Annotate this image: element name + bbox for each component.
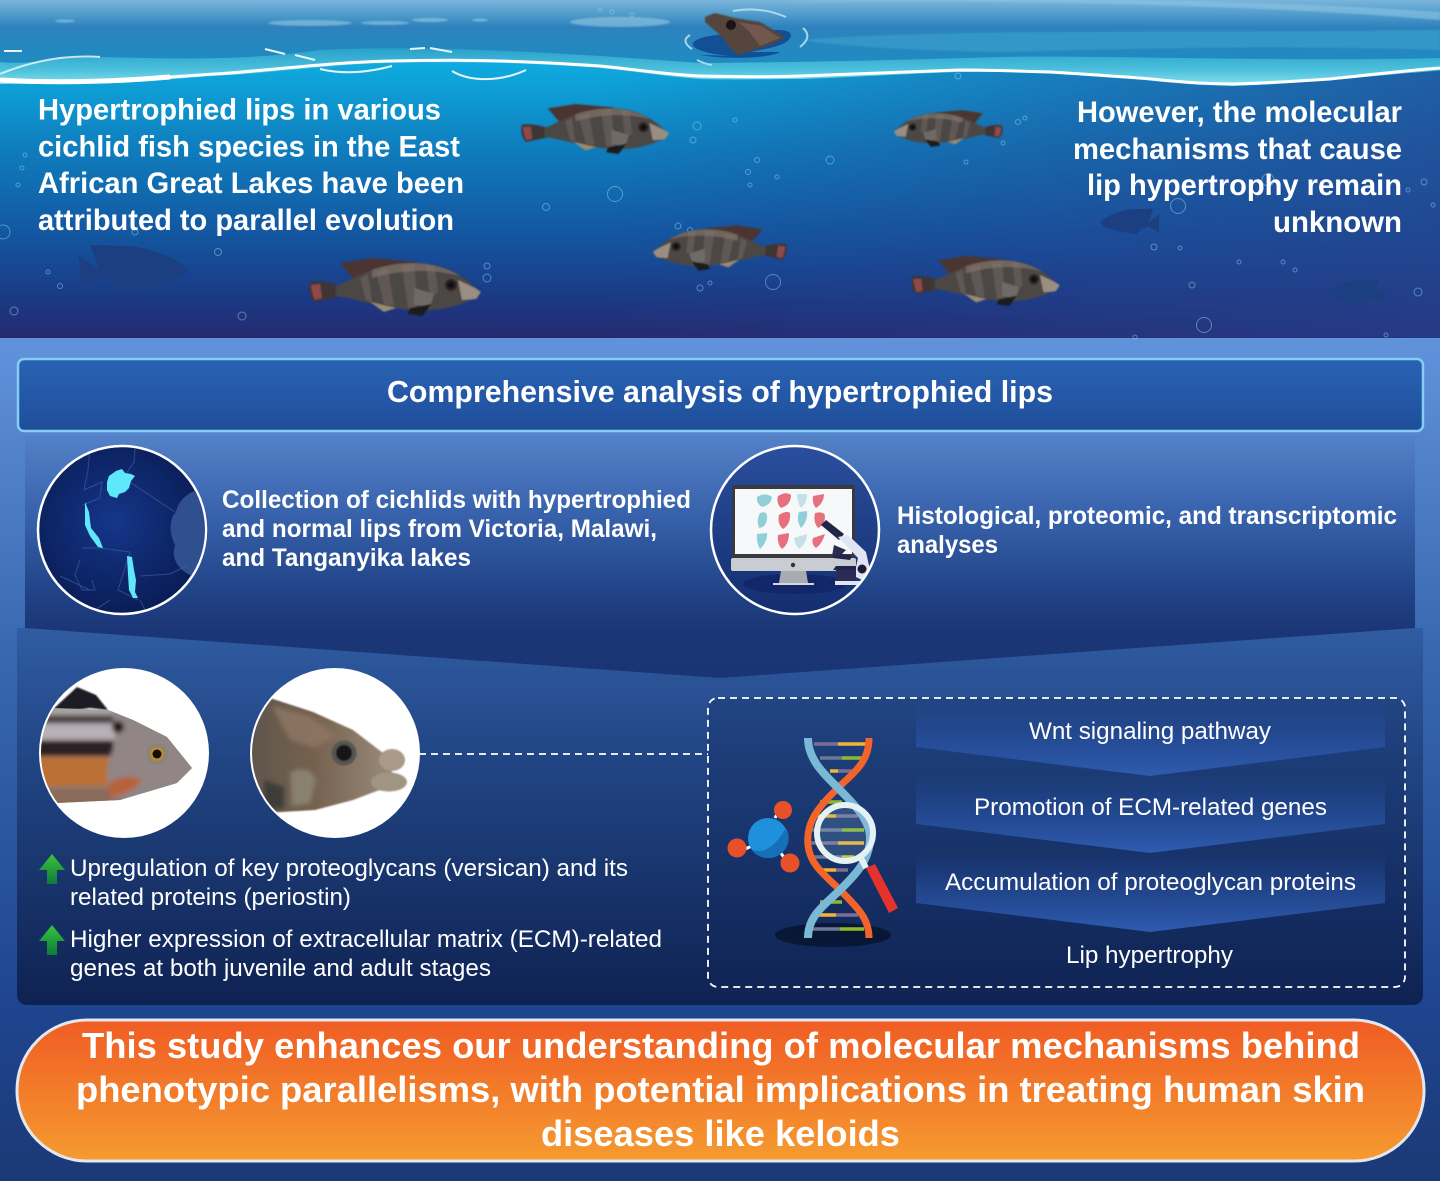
text: pathway steps: Accumulation of proteoglycan proteins <box>945 869 1356 896</box>
text: unknown mechanisms: lip hypertrophy remain <box>1087 169 1402 202</box>
conclusion pill: diseases like keloids <box>541 1113 900 1154</box>
text: upregulation: related proteins (periostin) <box>70 884 351 911</box>
findings list <box>39 854 662 982</box>
connector: dashed line to mechanism box <box>419 753 708 755</box>
text: collection of cichlids: and Tanganyika lakes <box>222 544 471 572</box>
wave cyan band <box>0 48 1440 87</box>
text: parallel evolution: Hypertrophied lips in various <box>38 94 441 126</box>
text: unknown mechanisms <box>1073 96 1402 239</box>
text: parallel evolution: African Great Lakes have been <box>38 167 464 200</box>
heading box <box>18 359 1423 431</box>
text: pathway steps: Lip hypertrophy <box>1066 942 1233 969</box>
text: higher expression <box>70 926 662 982</box>
photo: hypertrophied-lip fish <box>248 668 420 838</box>
bubbles <box>0 8 1435 339</box>
step bands <box>916 702 1385 932</box>
conclusion pill: phenotypic parallelisms, with potential implications in treating human skin <box>76 1069 1365 1110</box>
conclusion pill: This study enhances our understanding of molecular mechanisms behind <box>82 1025 1360 1066</box>
text: omics analyses: Histological, proteomic, and transcriptomic <box>897 502 1397 530</box>
text: pathway steps <box>945 718 1356 969</box>
surface fish and ripples <box>685 9 807 65</box>
icon: second green up arrow <box>39 925 65 955</box>
conclusion pill <box>17 1020 1424 1161</box>
panel: underwater scene <box>0 0 1440 339</box>
water surface highlights <box>55 0 1440 52</box>
text: upregulation: Upregulation of key proteoglycans (versican) and its <box>70 855 628 882</box>
text: collection of cichlids <box>222 486 691 572</box>
text: omics analyses <box>897 502 1397 559</box>
icon: microscope and monitor <box>711 446 879 614</box>
text: unknown mechanisms: unknown <box>1273 206 1402 239</box>
text: parallel evolution <box>38 94 464 237</box>
text: parallel evolution: cichlid fish species in the East <box>38 130 460 164</box>
text: collection of cichlids: Collection of cichlids with hypertrophied <box>222 486 691 514</box>
icon: DNA with magnifier and molecule <box>728 738 898 947</box>
photo: normal-lip fish <box>25 668 209 838</box>
silhouette fish <box>78 209 1385 305</box>
wave white crest <box>0 48 1440 84</box>
text: omics analyses: analyses <box>897 531 998 559</box>
page background <box>0 338 1440 1181</box>
text: collection of cichlids: and normal lips from Victoria, Malawi, <box>222 515 657 543</box>
text: higher expression: genes at both juvenile and adult stages <box>70 955 491 982</box>
icon: map of East African lakes <box>38 446 206 620</box>
text: pathway steps: Wnt signaling pathway <box>1029 718 1271 745</box>
text: upregulation <box>70 855 628 911</box>
fish group <box>309 104 1060 316</box>
panel: lower dark backdrop <box>17 628 1423 1005</box>
panel: mechanism dashed box <box>708 698 1405 987</box>
text: unknown mechanisms: mechanisms that cause <box>1073 133 1402 166</box>
text: unknown mechanisms: However, the molecular <box>1077 96 1402 129</box>
text: higher expression: Higher expression of extracellular matrix (ECM)-related <box>70 926 662 953</box>
deep water <box>0 63 1440 338</box>
icon: green up arrow <box>39 854 65 884</box>
text: pathway steps: Promotion of ECM-related genes <box>974 794 1327 821</box>
heading box: Comprehensive analysis of hypertrophied lips <box>387 374 1053 409</box>
panel: chevron sampling and analysis <box>18 359 1423 678</box>
text: parallel evolution: attributed to parallel evolution <box>38 204 454 237</box>
